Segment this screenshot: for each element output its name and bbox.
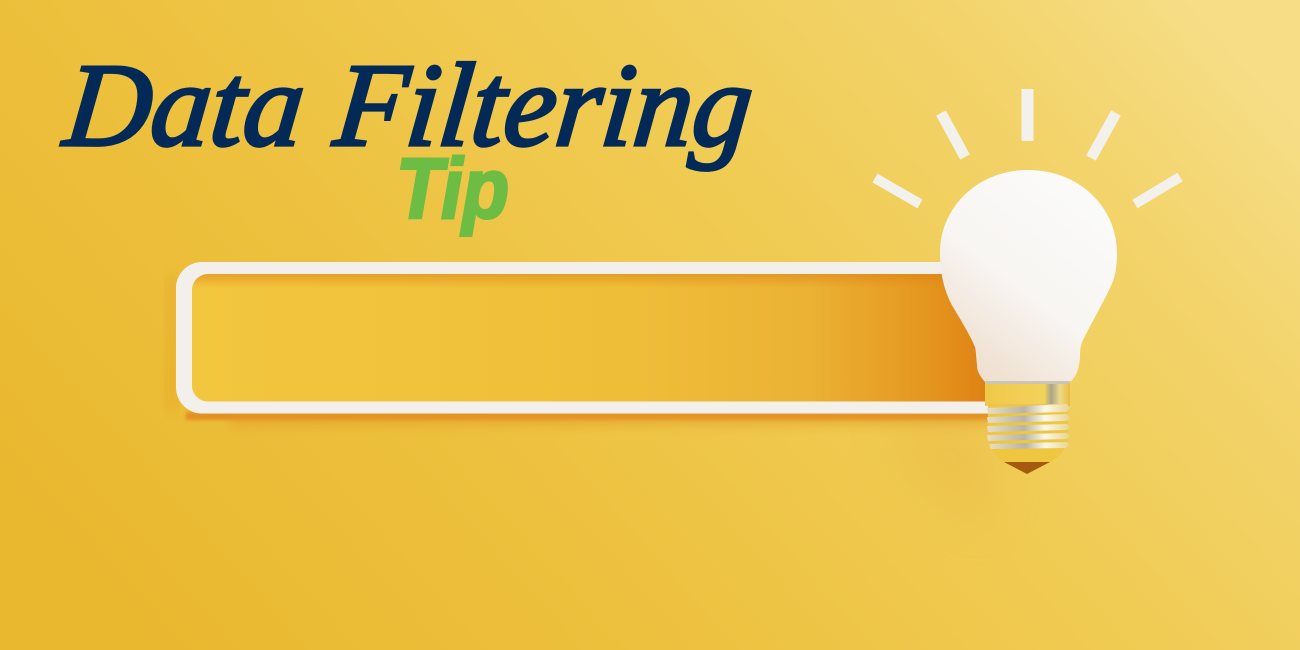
bulb glass xyxy=(940,170,1117,382)
screw collar xyxy=(985,383,1070,406)
threads xyxy=(987,404,1070,449)
soft shadow cast by bulb xyxy=(880,410,996,530)
title xyxy=(57,39,759,171)
title: Data xyxy=(57,39,311,171)
panel: recessed inner area of frame xyxy=(188,272,988,404)
title: Filtering xyxy=(328,39,759,171)
collar rim xyxy=(985,381,1070,384)
screw base bottom xyxy=(988,404,1068,463)
icon: light bulb xyxy=(940,170,1117,474)
subtitle: Tip: Tip xyxy=(396,142,509,237)
frame: white rounded search bar xyxy=(176,262,990,414)
shadow under frame xyxy=(186,412,990,420)
soft shadow left of frame xyxy=(165,275,179,410)
contact tip xyxy=(1004,462,1050,474)
icon: light rays xyxy=(875,89,1180,204)
lower outer glow below frame xyxy=(230,414,990,426)
